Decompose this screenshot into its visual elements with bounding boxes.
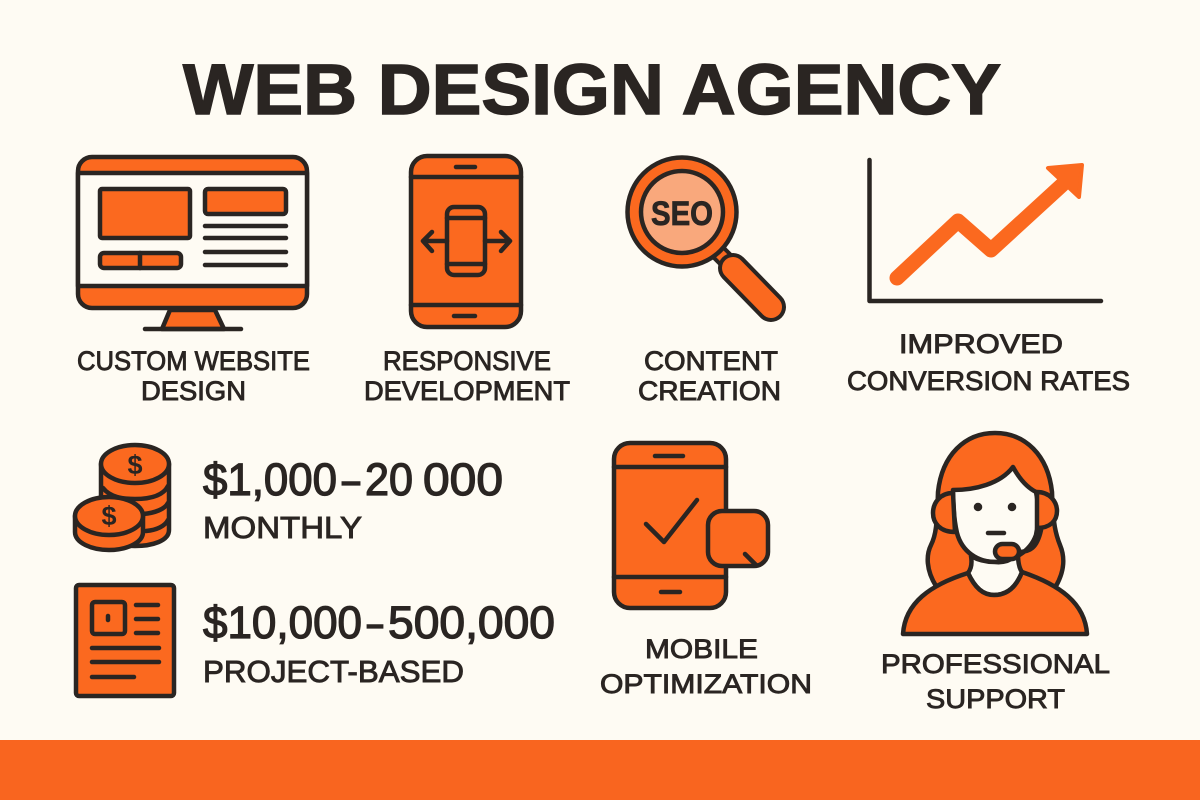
- label: responsive development: RESPONSIVE: [383, 346, 551, 376]
- title: WEB DESIGN AGENCY: [183, 51, 1001, 130]
- panel: custom website design: [77, 157, 310, 406]
- text: monthly price: $1,000: [203, 454, 337, 505]
- label: improved conversion rates: CONVERSION RATES: [847, 366, 1130, 396]
- text: monthly price: –: [342, 454, 360, 505]
- label: mobile optimization: [600, 634, 812, 699]
- panel: professional support: [881, 433, 1110, 714]
- label: mobile optimization: MOBILE: [645, 634, 758, 664]
- text: project price: PROJECT-BASED: [203, 654, 464, 689]
- icon: coin stacks: $: [101, 501, 117, 531]
- label: professional support: [881, 649, 1110, 714]
- label: custom website design: DESIGN: [141, 376, 246, 406]
- icon: phone with check and bubble: [614, 443, 768, 608]
- panel: responsive development: [364, 156, 570, 406]
- panel: monthly pricing: [75, 445, 503, 550]
- text: project price: –: [367, 597, 383, 648]
- text: monthly price: 000: [423, 454, 503, 505]
- chart: rising arrow: [870, 160, 1101, 301]
- label: custom website design: CUSTOM WEBSITE: [77, 346, 310, 376]
- icon: SEO magnifying glass: [628, 158, 771, 307]
- label: content creation: CREATION: [638, 376, 781, 406]
- label: mobile optimization: OPTIMIZATION: [600, 669, 812, 699]
- icon: responsive phone: [411, 156, 521, 327]
- icon: coin stacks: [75, 445, 169, 550]
- text: monthly price: [203, 454, 503, 545]
- label: responsive development: DEVELOPMENT: [364, 376, 570, 406]
- icon: desktop monitor: [78, 157, 307, 329]
- text: project price: [203, 597, 555, 689]
- label: responsive development: [364, 346, 570, 406]
- text: project price: 500,000: [388, 597, 555, 648]
- icon: SEO magnifying glass: SEO: [651, 195, 713, 233]
- label: content creation: CONTENT: [644, 346, 778, 376]
- icon: document: [76, 585, 174, 696]
- label: professional support: PROFESSIONAL: [881, 649, 1110, 679]
- footer band: [0, 740, 1200, 800]
- icon: support agent with headset: [903, 433, 1087, 634]
- panel: content creation: [628, 158, 781, 406]
- panel: project-based pricing: [76, 585, 555, 696]
- label: improved conversion rates: [847, 329, 1130, 396]
- text: monthly price: MONTHLY: [203, 510, 362, 545]
- panel: improved conversion rates: [847, 160, 1130, 396]
- label: custom website design: [77, 346, 310, 406]
- icon: coin stacks: $: [127, 450, 143, 480]
- text: monthly price: 20: [365, 454, 413, 505]
- panel: mobile optimization: [600, 443, 812, 699]
- text: project price: $10,000: [203, 597, 362, 648]
- label: improved conversion rates: IMPROVED: [899, 329, 1063, 359]
- label: content creation: [638, 346, 781, 406]
- label: professional support: SUPPORT: [926, 684, 1065, 714]
